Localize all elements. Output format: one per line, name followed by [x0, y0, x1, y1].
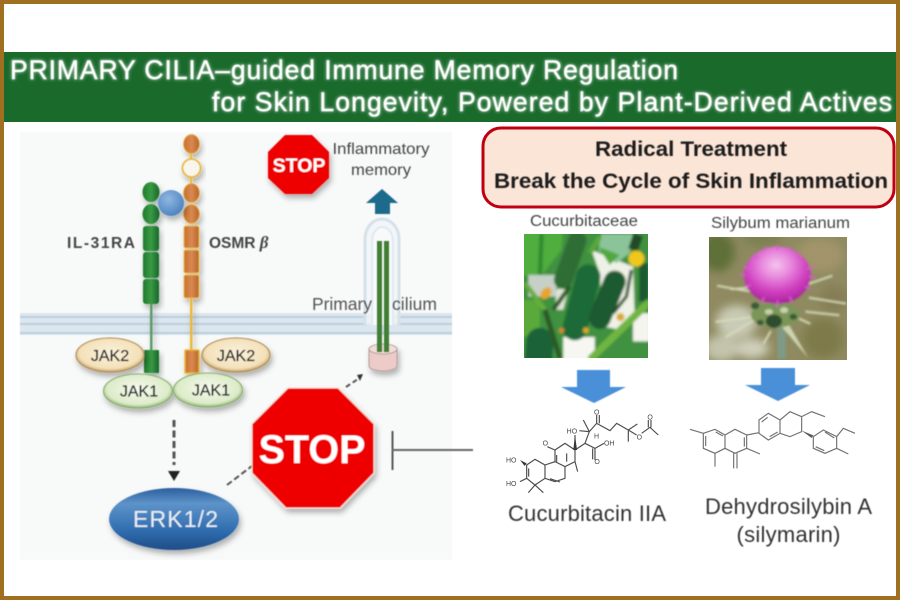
- arrow: silybum to compound: [745, 368, 810, 401]
- label: inflammatory memory: Inflammatory: [332, 141, 430, 158]
- ERK1/2 node: ERK1/2: [133, 506, 218, 532]
- arrow: ERK1/2 to stop: [227, 466, 252, 485]
- molecule: cucurbitacin IIA: OH: [604, 441, 614, 448]
- label: Dehydrosilybin A (silymarin): [705, 494, 872, 547]
- photo: milk thistle: [701, 230, 854, 365]
- small stop sign: [268, 135, 329, 194]
- JAK1 right: [174, 373, 242, 407]
- label: Cucurbitaceae: Cucurbitaceae: [530, 213, 638, 230]
- title banner: [4, 52, 896, 122]
- title banner: for Skin Longevity, Powered by Plant-Derived Actives: [212, 87, 892, 117]
- arrow: cucurbitaceae to compound: [561, 370, 626, 403]
- label: IL-31RA: IL-31RA: [67, 235, 135, 252]
- label: inflammatory memory: memory: [351, 162, 411, 179]
- arrow: up from cilium: [366, 189, 398, 214]
- JAK2 left: JAK2: [91, 348, 129, 365]
- receptor: IL-31RA: [142, 182, 160, 373]
- label: primary cilium: cilium: [392, 294, 437, 314]
- label: OSMR beta: OSMR β: [209, 233, 269, 252]
- label: Silybum marianum: Silybum marianum: [711, 215, 850, 232]
- molecule: cucurbitacin IIA: O: [647, 414, 653, 421]
- callout: radical treatment: Break the Cycle of Skin Inflammation: [494, 170, 888, 193]
- molecule: cucurbitacin IIA: HO: [506, 481, 517, 488]
- molecule: cucurbitacin IIA: [506, 410, 658, 493]
- JAK1 left: JAK1: [120, 384, 158, 400]
- label: inflammatory memory: [332, 141, 430, 179]
- label: primary cilium: [312, 294, 437, 314]
- ligand: blue sphere: [158, 190, 184, 216]
- panel: signalling pathway: [20, 132, 452, 560]
- ERK1/2 node: [109, 488, 239, 550]
- molecule: cucurbitacin IIA: H: [594, 434, 599, 441]
- molecule: cucurbitacin IIA: HO: [567, 428, 578, 435]
- molecule: cucurbitacin IIA: O: [594, 410, 600, 417]
- JAK2 left: [76, 338, 144, 372]
- molecule: cucurbitacin IIA: O: [543, 440, 549, 447]
- small stop sign: STOP: [273, 155, 325, 177]
- label: Cucurbitacin IIA: Cucurbitacin IIA: [508, 501, 666, 526]
- title banner: for Skin Longevity, Powered by Plant-Derived Actives: [212, 87, 892, 117]
- molecule: cucurbitacin IIA: HO: [506, 458, 517, 465]
- callout: radical treatment: Radical Treatment: [595, 138, 787, 161]
- label: Dehydrosilybin A (silymarin): Dehydrosilybin A: [705, 494, 872, 519]
- JAK1 left: [104, 374, 172, 408]
- label: Dehydrosilybin A (silymarin): (silymarin): [736, 522, 840, 547]
- molecule: cucurbitacin IIA: O: [594, 459, 600, 466]
- cell membrane: [20, 313, 452, 335]
- JAK2 right: [202, 338, 270, 372]
- inhibition bar: [392, 431, 473, 470]
- arrow: stop to cilium: [346, 374, 363, 387]
- JAK1 right: JAK1: [192, 382, 230, 400]
- molecule: dehydrosilybin A: [690, 412, 855, 468]
- molecule: cucurbitacin IIA: O: [637, 434, 643, 441]
- JAK2 right: JAK2: [217, 348, 255, 365]
- title banner: PRIMARY CILIA–guided Immune Memory Regulation: [10, 55, 678, 85]
- label: primary cilium: Primary: [312, 294, 372, 314]
- title banner: PRIMARY CILIA–guided Immune Memory Regulation: [10, 55, 678, 85]
- arrow: JAK1 to ERK1/2: [168, 420, 180, 481]
- primary cilium: [312, 219, 437, 371]
- callout: radical treatment: [483, 128, 894, 207]
- receptor: OSMR beta: [182, 134, 200, 373]
- cilium base: [369, 344, 397, 371]
- large stop sign: [252, 388, 374, 508]
- photo: cucumbers: [520, 230, 653, 363]
- large stop sign: STOP: [259, 428, 365, 472]
